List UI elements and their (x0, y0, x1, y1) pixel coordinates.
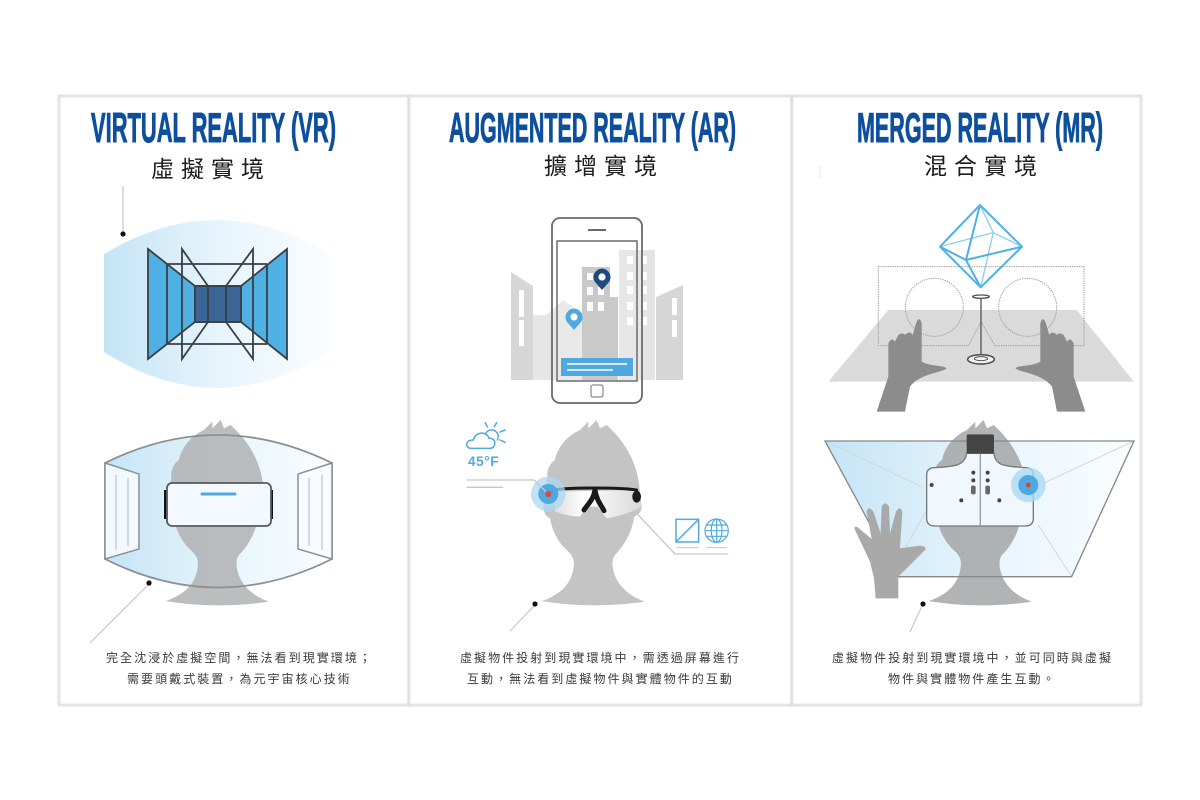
icon: dark map pin (594, 269, 610, 290)
caption: MR: 虛擬物件投射到現實環境中，並可同時與虛擬 (832, 650, 1113, 665)
panel: augmented reality (409, 96, 792, 705)
callout line: AR bottom (510, 601, 538, 631)
caption: AR (460, 650, 741, 686)
subheading: VR Chinese: 虛擬實境 (151, 156, 271, 182)
panel: merged reality (792, 96, 1141, 705)
hologram stand (968, 295, 994, 364)
caption: AR: 虛擬物件投射到現實環境中，需透過屏幕進行 (460, 650, 741, 665)
callout line: VR bottom (90, 580, 152, 643)
icon: weather (467, 423, 505, 448)
right hand (1015, 319, 1085, 412)
left hand (877, 319, 947, 412)
icon: window square (676, 519, 699, 542)
illustration: AR glasses user (467, 420, 728, 605)
caption: VR (106, 650, 373, 686)
callout line: MR bottom (910, 601, 926, 632)
subheading: AR Chinese: 擴增實境 (544, 153, 664, 179)
illustration: MR holographic object and hands (828, 205, 1134, 412)
callout line: VR top (120, 186, 126, 237)
heading: VR: VIRTUAL REALITY (VR) (91, 104, 336, 151)
subheading: MR Chinese: 混合實境 (924, 153, 1044, 179)
caption: MR: 物件與實體物件產生互動。 (888, 671, 1057, 686)
illustration: VR immersive corridor (104, 220, 330, 388)
illustration: VR headset user (105, 420, 332, 605)
temperature label: 45°F (468, 454, 499, 469)
icon: blue map pin (566, 309, 582, 330)
illustration: MR headset user (825, 420, 1134, 605)
icon: globe (705, 519, 728, 542)
heading: AR: AUGMENTED REALITY (AR) (449, 104, 736, 151)
hologram octahedron (940, 205, 1022, 287)
illustration: AR phone over city (511, 218, 683, 403)
caption: MR (832, 650, 1113, 686)
panel: virtual reality (59, 96, 409, 705)
caption: VR: 完全沈浸於虛擬空間，無法看到現實環境； (106, 650, 373, 665)
caption: AR: 互動，無法看到虛擬物件與實體物件的互動 (467, 671, 734, 686)
sensor glow (1011, 468, 1046, 502)
raised hand (855, 503, 926, 598)
caption: VR: 需要頭戴式裝置，為元宇宙核心技術 (127, 671, 352, 686)
